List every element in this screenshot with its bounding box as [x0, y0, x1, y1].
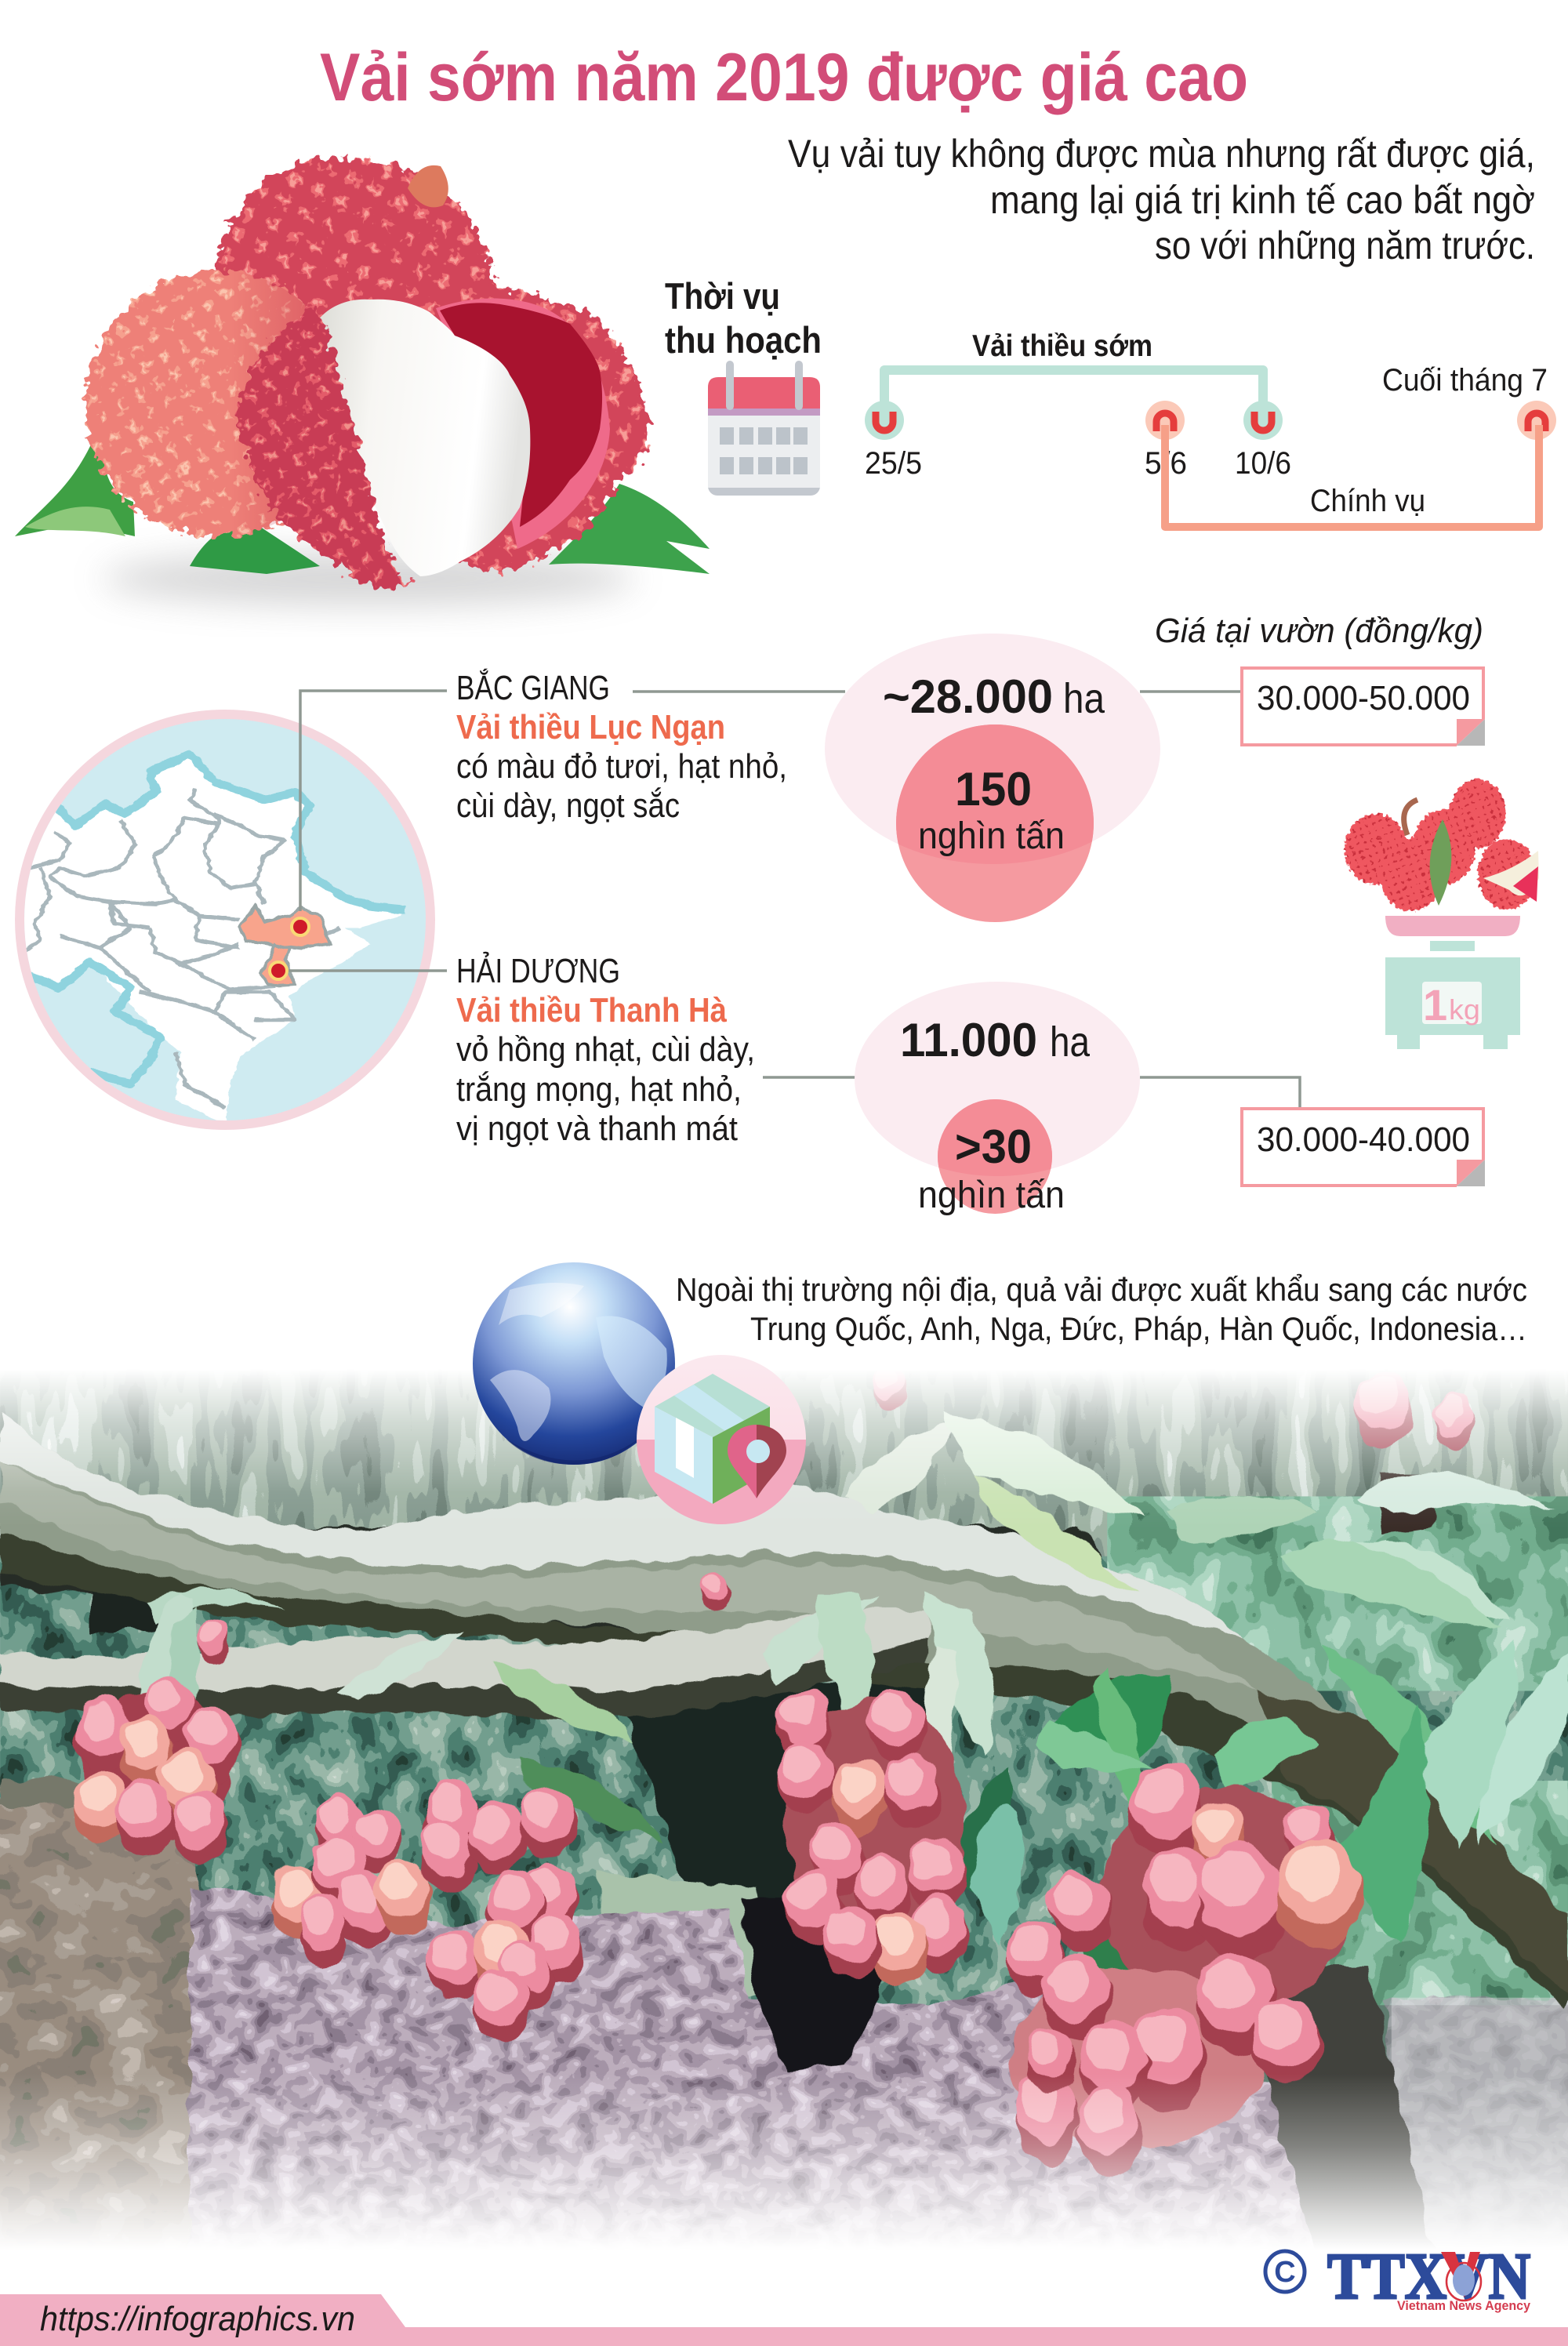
stat bubble: Bắc Giang: ~28.000	[883, 670, 1053, 723]
text block: Hải Dương	[456, 951, 755, 1148]
stat bubble: Bắc Giang: nghìn tấn	[918, 815, 1065, 857]
timeline: early lychee season	[865, 329, 1291, 481]
icon: export package with location pin	[637, 1355, 806, 1524]
timeline: early lychee season: 25/5	[865, 446, 922, 481]
logo: TTXVN: TTXVN	[1327, 2240, 1530, 2313]
marker: Hải Dương	[270, 962, 287, 979]
stat bubble: Hải Dương: nghìn tấn	[918, 1175, 1065, 1216]
stat bubble: Hải Dương: ha	[1050, 1019, 1091, 1066]
connector lines	[289, 691, 1300, 1107]
timeline: main season: Cuối tháng 7	[1382, 363, 1548, 398]
stat bubble: Bắc Giang: 150	[955, 763, 1032, 815]
price box: Hải Dương	[1242, 1109, 1485, 1186]
timeline: main season: Chính vụ	[1310, 484, 1425, 518]
stat bubble: Hải Dương: 11.000	[900, 1014, 1037, 1066]
photo: lychee orchard background	[0, 1354, 1568, 2297]
timeline: main season	[1145, 363, 1556, 527]
icon: calendar	[708, 361, 820, 496]
price heading: Giá tại vườn (đồng/kg)	[1155, 612, 1483, 650]
text block: Bắc Giang: có màu đỏ tươi, hạt nhỏ,	[456, 747, 787, 786]
timeline: early lychee season: Vải thiều sớm	[972, 329, 1152, 363]
marker: Bắc Giang	[292, 918, 309, 935]
price box: Bắc Giang	[1242, 668, 1485, 746]
illustration: peeled lychee fruits with leaves	[15, 158, 710, 605]
timeline: main season: 5/6	[1145, 446, 1187, 481]
logo: TTXVN: C	[1274, 2256, 1296, 2289]
logo: TTXVN	[1265, 2240, 1531, 2313]
text block: Bắc Giang: BẮC GIANG	[456, 668, 610, 707]
heading: harvest season	[665, 275, 822, 361]
intro text	[788, 132, 1535, 267]
timeline: early lychee season: 10/6	[1235, 446, 1291, 481]
icon: lychees on a scale: kg	[1449, 993, 1480, 1026]
price box: Bắc Giang: 30.000-50.000	[1257, 679, 1470, 717]
text block: Hải Dương: vị ngọt và thanh mát	[456, 1109, 738, 1148]
text block: Bắc Giang: Vải thiều Lục Ngạn	[456, 708, 725, 746]
stat bubble: Hải Dương: >30	[955, 1120, 1032, 1173]
text block: Bắc Giang: cùi dày, ngọt sắc	[456, 786, 680, 825]
highlighted provinces	[240, 906, 330, 986]
icon: lychees on a scale: 1	[1423, 980, 1447, 1030]
icon: globe	[473, 1262, 675, 1465]
heading: harvest season: thu hoạch	[665, 319, 822, 361]
stat bubble: Bắc Giang	[825, 634, 1160, 922]
price box: Hải Dương: 30.000-40.000	[1257, 1120, 1470, 1159]
text block: Hải Dương: HẢI DƯƠNG	[456, 951, 620, 990]
footer band	[0, 2294, 1568, 2346]
icon: lychees on a scale	[1345, 779, 1539, 1049]
text block: Hải Dương: trắng mọng, hạt nhỏ,	[456, 1070, 742, 1109]
map of northern Vietnam	[0, 714, 430, 1125]
stat bubble: Bắc Giang: ha	[1063, 675, 1105, 722]
logo: TTXVN: Vietnam News Agency	[1397, 2298, 1531, 2313]
footer url: https://infographics.vn	[40, 2300, 355, 2338]
text block: Hải Dương: vỏ hồng nhạt, cùi dày,	[456, 1030, 755, 1069]
stat bubble: Hải Dương	[855, 982, 1140, 1216]
export text	[676, 1271, 1527, 1347]
text block: Hải Dương: Vải thiều Thanh Hà	[456, 991, 727, 1030]
text block: Bắc Giang	[456, 668, 787, 825]
title: Vải sớm năm 2019 được giá cao	[320, 40, 1248, 115]
heading: harvest season: Thời vụ	[665, 275, 780, 317]
